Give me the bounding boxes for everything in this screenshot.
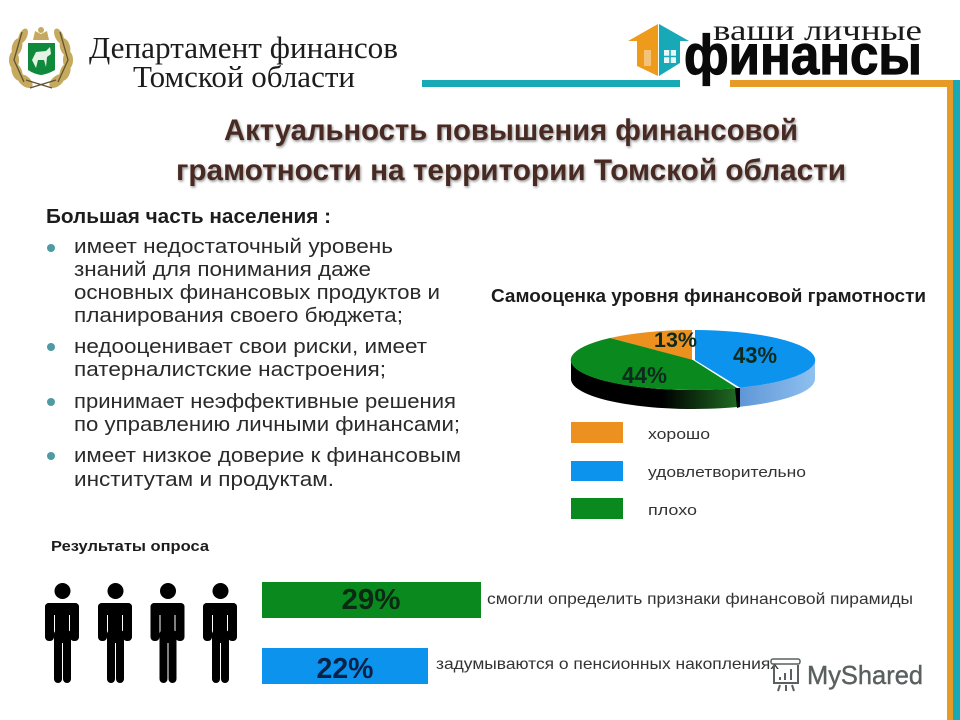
text block: population characteristics — [46, 206, 461, 491]
title: Актуальность повышения финансовой — [224, 114, 798, 147]
bar: 29% — [262, 582, 481, 618]
legend swatch: green — [571, 498, 623, 519]
bar: 29%: 29% — [342, 584, 401, 616]
bar: 22% — [262, 648, 428, 685]
text block: population characteristics: Большая часть населения : — [46, 206, 331, 228]
teal header line — [422, 80, 680, 87]
legend swatch: blue — [571, 461, 623, 481]
bar label: 29%: смогли определить признаки финансовой пирамиды — [487, 591, 913, 608]
green slice — [571, 338, 737, 390]
header text: department name: Департамент финансов — [89, 30, 398, 65]
legend label: bad: плохо — [648, 502, 697, 519]
logo: text: финансы — [684, 23, 922, 86]
legend label: satisfactory: удовлетворительно — [648, 464, 806, 481]
orange slice — [610, 330, 692, 360]
logo: house icon — [628, 24, 689, 76]
icon: coat of arms — [9, 27, 73, 91]
text block: population characteristics: имеет недостаточный уровень — [74, 236, 393, 258]
text block: population characteristics: недооценивает свои риски, имеет — [74, 336, 427, 358]
teal right edge — [953, 80, 960, 720]
legend label: good: хорошо — [648, 426, 710, 443]
header text: department name — [89, 30, 398, 94]
chart heading: Самооценка уровня финансовой грамотности — [491, 286, 926, 306]
survey heading: Результаты опроса — [51, 538, 210, 555]
green pie side — [571, 360, 737, 409]
text block: population characteristics: патерналистские настроения; — [74, 359, 386, 381]
title: грамотности на территории Томской области — [176, 154, 846, 187]
label: 43%: 43% — [733, 342, 777, 368]
black wedge edge — [735, 388, 740, 408]
title — [176, 114, 846, 187]
text block: population characteristics: планирования своего бюджета; — [74, 305, 403, 327]
blue pie side — [740, 360, 815, 407]
bar: 22%: 22% — [316, 653, 374, 685]
pie chart — [571, 329, 815, 409]
header text: department name: Томской области — [133, 59, 355, 94]
logo: text: ваши личные — [713, 14, 922, 47]
text block: population characteristics: имеет низкое доверие к финансовым — [74, 445, 461, 467]
orange header line and right frame — [730, 80, 953, 720]
label: 44%: 44% — [622, 362, 667, 388]
icon: four people — [45, 583, 237, 683]
legend swatch: orange — [571, 422, 623, 443]
label: 13%: 13% — [654, 329, 697, 352]
text block: population characteristics: институтам и продуктам. — [74, 469, 334, 491]
bar label: 22%: задумываются о пенсионных накоплениях — [436, 656, 779, 673]
watermark: MyShared: MyShared — [807, 660, 923, 690]
text block: population characteristics: основных финансовых продуктов и — [74, 282, 440, 304]
text block: population characteristics: по управлению личными финансами; — [74, 414, 460, 436]
legend — [571, 422, 806, 519]
blue slice — [695, 330, 815, 388]
text block: population characteristics: принимает неэффективные решения — [74, 391, 456, 413]
text block: population characteristics: знаний для понимания даже — [74, 259, 371, 281]
